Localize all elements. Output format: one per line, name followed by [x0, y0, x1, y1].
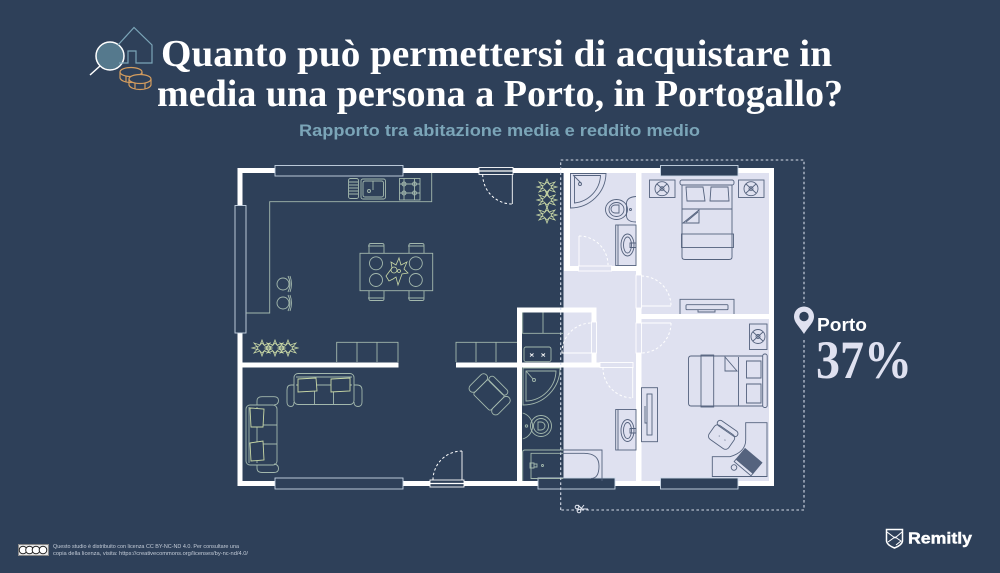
bar stools: [277, 276, 292, 311]
license text: copia della licenza, visita: https://creativecommons.org/licenses/by-nc-nd/4.0/: [53, 551, 249, 557]
lower bathroom: bathtub, highlighted side: [563, 450, 602, 481]
lower bedroom: nightstand: [750, 324, 767, 350]
table flowers: [386, 258, 408, 285]
icon: house, magnifier and coins: [90, 28, 152, 90]
title: Quanto può permettersi di acquistare in: [161, 33, 832, 75]
windows: [235, 166, 738, 489]
icon: location pin: [794, 306, 814, 334]
door: top entrance: [479, 168, 513, 204]
kitchen counter: [246, 173, 432, 313]
lower bedroom: mouse: [731, 465, 737, 470]
upper bathroom: corner shower: [570, 174, 606, 208]
shelves: [337, 342, 517, 362]
lower bathroom: bathtub, dark side: [522, 450, 563, 481]
kitchen stove: [400, 178, 420, 200]
upper bathroom: toilet: [606, 196, 636, 222]
armchair: [467, 369, 515, 417]
upper bedroom: dresser: [680, 299, 734, 314]
value: 37%: 37%: [816, 330, 912, 390]
door openings in walls: [578, 266, 642, 368]
highlighted area: 37% of the home: [564, 173, 770, 481]
washing machine: [524, 347, 551, 362]
interior doors: [562, 236, 671, 398]
utility cabinets: [523, 312, 563, 333]
sofa: left: [246, 397, 278, 472]
logo: Remitly: [886, 530, 972, 548]
dining table: [360, 244, 433, 300]
plants: top right: [537, 179, 557, 223]
lower bedroom: bed: [688, 354, 767, 408]
lower bathroom: corner shower: [523, 368, 560, 405]
walls: [238, 168, 774, 486]
logo: Remitly: Remitly: [908, 530, 972, 548]
license badge: [18, 544, 49, 556]
kitchen sink: [348, 178, 386, 199]
upper bedroom: bed: [680, 180, 734, 260]
icon: scissors: [575, 505, 588, 513]
lower bathroom: toilet: [523, 413, 552, 439]
subtitle: Rapporto tra abitazione media e reddito medio: [299, 121, 700, 140]
label: Porto: Porto: [817, 315, 867, 335]
panel: floor plan: [235, 166, 774, 489]
sofa: top: [287, 374, 362, 406]
door: bottom entrance: [430, 451, 464, 487]
lower bedroom: desk chair: [707, 419, 739, 451]
lower bathroom: vanity: [616, 410, 636, 450]
license text: Questo studio è distribuito con licenza CC BY-NC-ND 4.0. Per consultare una: [53, 544, 239, 550]
lower bedroom: wardrobe: [642, 388, 658, 442]
upper bedroom: nightstands: [650, 180, 764, 198]
upper bathroom: vanity: [616, 225, 636, 266]
lower bedroom: laptop: [734, 449, 762, 476]
cut line around the highlighted area: [561, 160, 804, 510]
plants: bottom left: [252, 340, 298, 356]
title: media una persona a Porto, in Portogallo?: [157, 73, 843, 115]
lower bedroom: desk: [712, 423, 767, 476]
